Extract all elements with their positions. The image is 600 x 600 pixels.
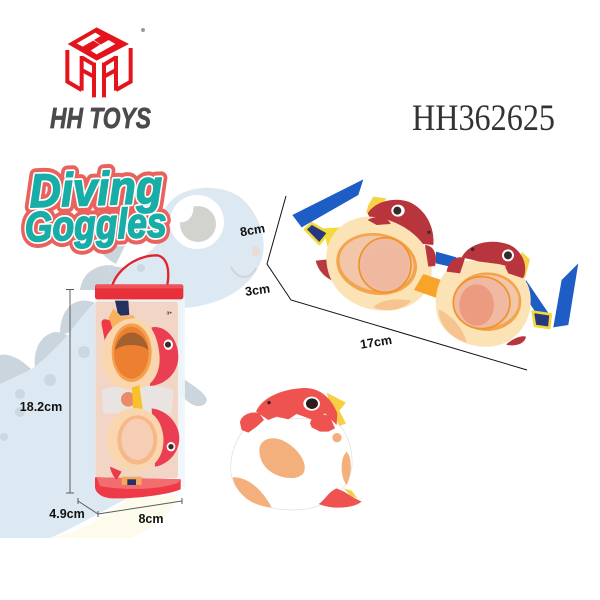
cream belly [50, 495, 178, 538]
logo: HH Toys [50, 27, 152, 135]
egg dinosaur illustration [231, 388, 362, 510]
logo cube mark [67, 27, 145, 97]
goggle bridge [414, 274, 452, 301]
title teal letters [23, 160, 167, 250]
card middle art [102, 386, 173, 413]
goggle two [107, 408, 179, 485]
label: goggles height: 8cm [239, 221, 266, 239]
package handle [112, 255, 168, 285]
dinosaur plates [0, 246, 207, 406]
product code: HH362625 [412, 98, 555, 139]
label: goggles width: 17cm [359, 333, 393, 352]
right claws [447, 257, 523, 278]
title white ring: Goggles [24, 199, 167, 250]
logo wordmark: HH TOYS [50, 103, 152, 135]
dino left claw [240, 413, 264, 433]
goggles dimension lines [267, 196, 527, 370]
background dinosaur illustration [0, 188, 264, 538]
product package [95, 255, 185, 498]
title teal letters: Goggles [24, 199, 167, 250]
goggles straps [292, 179, 578, 327]
left lens [331, 227, 422, 301]
right red fin [507, 336, 526, 345]
dino crest [327, 393, 346, 426]
title white ring: Diving [29, 160, 163, 217]
title outline: Diving [29, 160, 163, 217]
dino tail [319, 488, 362, 508]
dinosaur cheek and smile [231, 246, 260, 277]
dino head [256, 388, 337, 425]
dino right claw [310, 414, 335, 432]
left goggle shell [326, 217, 432, 311]
egg spots [233, 433, 351, 507]
label: package depth: 4.9cm [49, 507, 85, 521]
right dino head [462, 242, 530, 278]
right goggle shell [436, 261, 531, 347]
left dino head [366, 197, 433, 245]
strap buckles [305, 223, 551, 328]
left red fin [316, 259, 338, 283]
package base [95, 477, 181, 498]
label: goggles depth: 3cm [244, 282, 271, 299]
title outline [23, 160, 167, 250]
title white ring [23, 160, 167, 250]
goggle one [102, 308, 178, 390]
printed card [95, 302, 178, 478]
title: Diving Goggles [23, 160, 167, 250]
label: package height: 18.2cm [20, 400, 62, 414]
dinosaur eye [170, 195, 224, 249]
title teal letters: Diving [29, 160, 163, 217]
top strap [115, 301, 129, 316]
dino eye [267, 397, 320, 411]
right cheek patch [439, 309, 467, 343]
goggle bridge [132, 385, 143, 413]
right lens [453, 272, 521, 331]
dinosaur body [0, 188, 264, 538]
left claws [368, 217, 436, 267]
package lid [95, 284, 183, 299]
egg shell [231, 417, 352, 510]
dinosaur spots [0, 264, 145, 441]
clear tube [95, 297, 185, 487]
package dimension lines [66, 290, 182, 517]
title outline: Goggles [24, 199, 167, 250]
tail tip [344, 488, 357, 498]
age mark: 3+ [166, 310, 172, 316]
label: package width: 8cm [138, 512, 164, 526]
left cheek patch [373, 299, 412, 310]
product goggles [292, 179, 578, 347]
